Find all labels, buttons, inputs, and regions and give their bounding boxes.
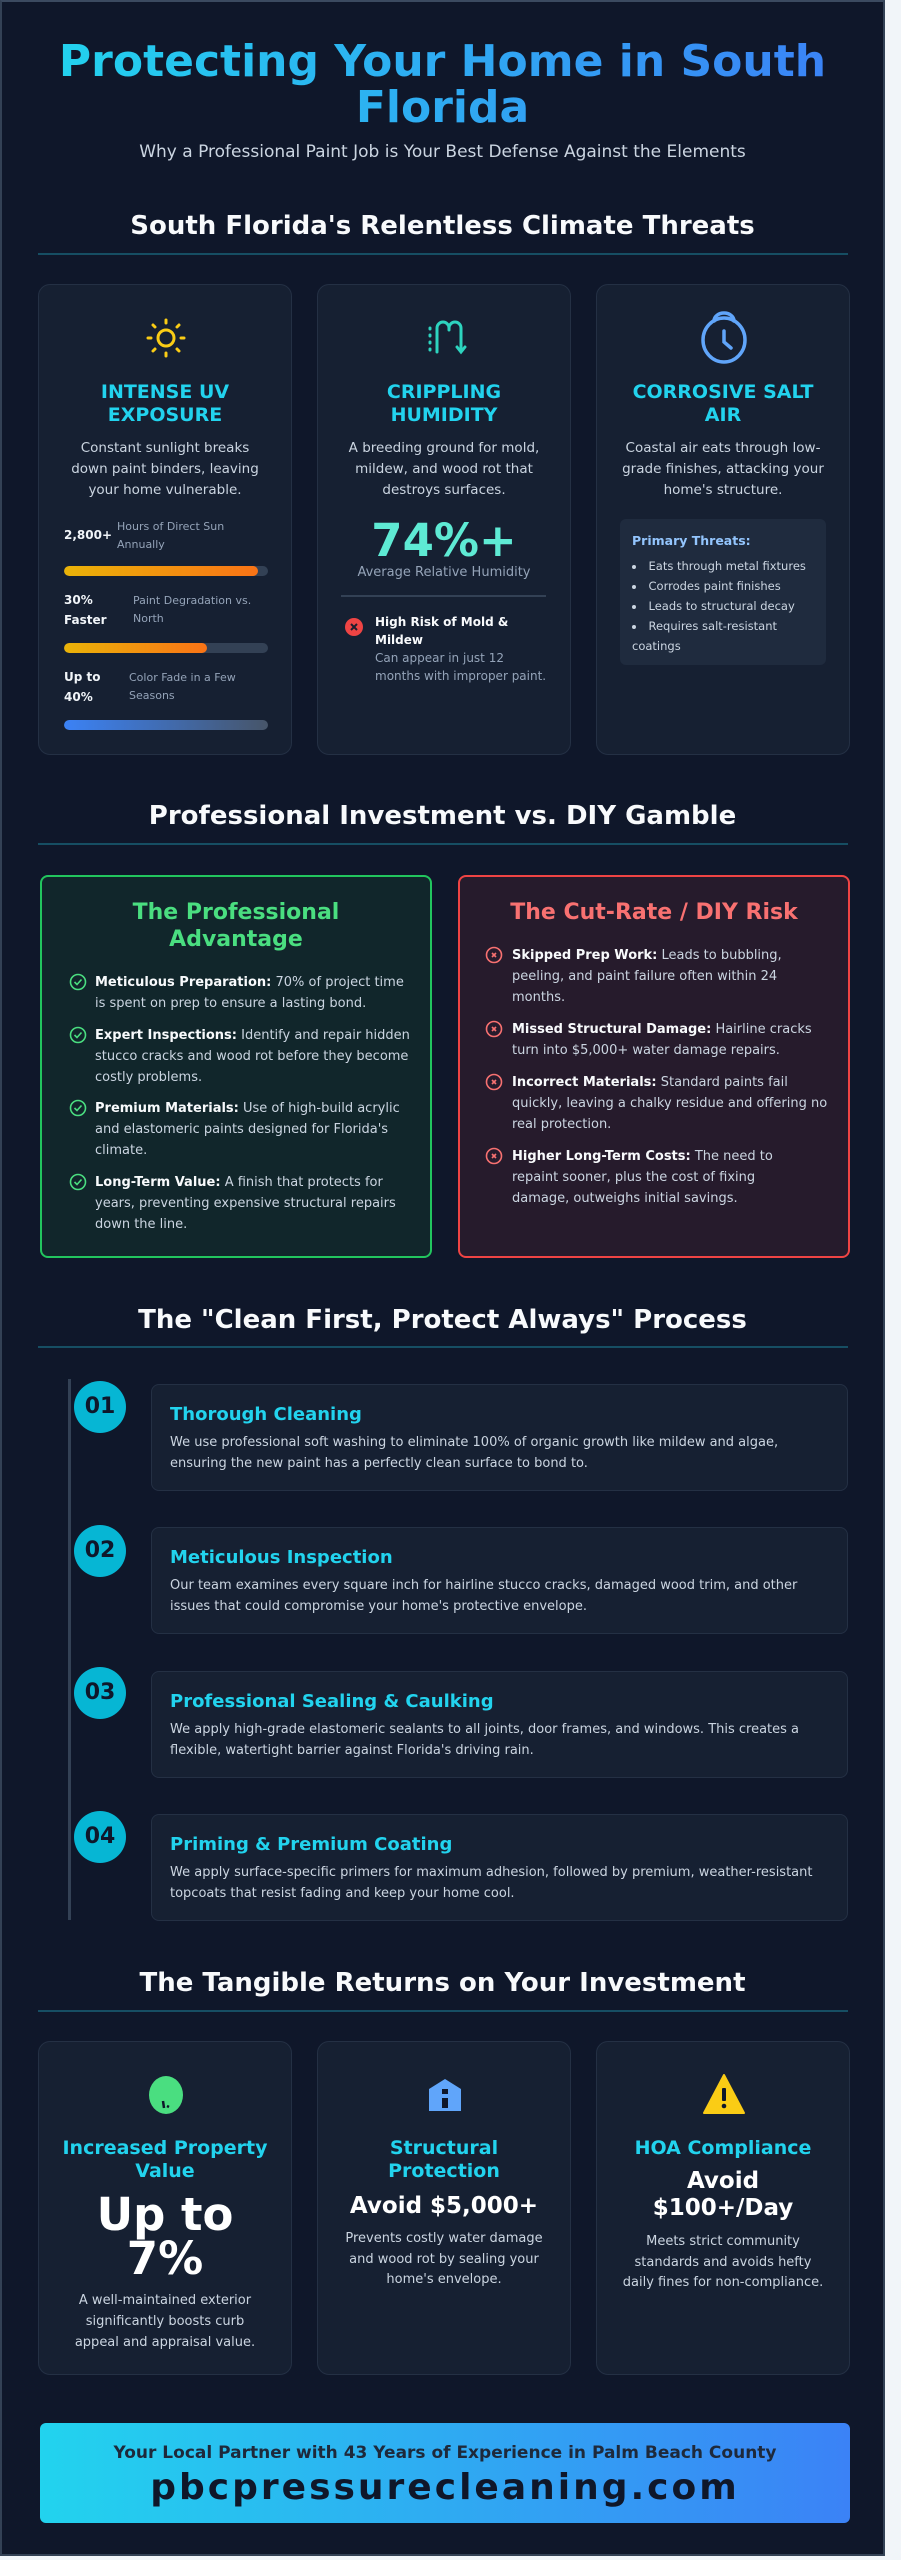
description: A well-maintained exterior xyxy=(79,2293,251,2308)
stat: 40% fade xyxy=(64,670,100,704)
step 4: We apply surface-specific primers for maximum adhesion, followed by premium, weather-resistant topcoats that resist fading and keep your home cool. xyxy=(170,1865,812,1901)
step 3: We apply high-grade elastomeric sealants to all joints, door frames, and windows. This creates a flexible, watertight barrier against Florida's driving rain. xyxy=(170,1722,799,1758)
title: EXPOSURE xyxy=(108,404,222,426)
title: Advantage xyxy=(169,927,303,952)
items: Skipped Prep Work: Leads to bubbling, peeling, and paint failure often within 24 months. xyxy=(512,948,782,1005)
panel: intense UV: Annually xyxy=(117,538,165,551)
title: Protection xyxy=(388,2160,500,2182)
heading: process: The "Clean First, Protect Always" Process xyxy=(138,1305,747,1335)
threats list xyxy=(620,519,826,665)
title: Increased Property xyxy=(62,2137,268,2159)
callout: mold risk xyxy=(345,615,546,683)
stat: 40% fade: Up to xyxy=(64,670,100,684)
description xyxy=(623,2234,823,2290)
panel: humidity xyxy=(317,284,571,755)
stat: 7% xyxy=(127,2232,203,2285)
panel: intense UV: North xyxy=(133,612,164,625)
description: destroys surfaces. xyxy=(382,482,506,498)
CTA banner: Your Local Partner with 43 Years of Experience in Palm Beach County xyxy=(113,2443,777,2463)
stat: 30% faster: 30% xyxy=(64,593,93,607)
step 1 xyxy=(74,1381,848,1491)
step 4: 04 xyxy=(85,1824,115,1849)
title: Protecting Your Home in South Florida xyxy=(59,36,826,133)
title: HUMIDITY xyxy=(391,404,497,426)
CTA banner xyxy=(40,2423,850,2523)
stat: 30% faster xyxy=(64,593,107,627)
items: Expert Inspections: Identify and repair hidden stucco cracks and wood rot before they become costly problems. xyxy=(95,1028,410,1085)
step 2: 02 xyxy=(85,1538,115,1563)
description: grade finishes, attacking your xyxy=(622,461,824,477)
callout: mold risk: High Risk of Mold & xyxy=(375,615,508,629)
items xyxy=(486,946,827,1206)
title xyxy=(62,2137,268,2182)
description: and wood rot by sealing your xyxy=(349,2252,539,2266)
panel: HOA compliance xyxy=(596,2041,850,2375)
step 1: We use professional soft washing to eliminate 100% of organic growth like mildew and algae, ensuring the new paint has a perfectly clean surface to bond to. xyxy=(170,1435,778,1471)
threats list: Primary Threats: xyxy=(632,533,751,548)
stat: Avoid xyxy=(687,2168,759,2194)
step 3 xyxy=(74,1667,848,1778)
description: A breeding ground for mold, xyxy=(349,440,539,456)
heading: professional vs DIY: Professional Investment vs. DIY Gamble xyxy=(149,801,736,831)
description: home's structure. xyxy=(664,482,782,498)
step 2: Our team examines every square inch for hairline stucco cracks, damaged wood trim, and other issues that could compromise your home's protective envelope. xyxy=(170,1578,797,1614)
stat: Up to xyxy=(97,2188,233,2241)
stat: $100+/Day xyxy=(653,2195,793,2221)
icon: warning xyxy=(703,2074,745,2114)
items: Premium Materials: Use of high-build acrylic and elastomeric paints designed for Florida's climate. xyxy=(95,1101,400,1158)
step 1: 01 xyxy=(85,1394,115,1419)
heading: climate threats: South Florida's Relentless Climate Threats xyxy=(130,211,755,241)
panel: intense UV xyxy=(38,284,292,755)
title xyxy=(101,381,229,426)
step 2: Meticulous Inspection xyxy=(170,1547,393,1568)
title xyxy=(388,2137,500,2182)
description xyxy=(348,440,539,498)
threats list: Corrodes paint finishes xyxy=(648,579,781,593)
panel: property value xyxy=(38,2041,292,2375)
title xyxy=(132,900,339,952)
step 4 xyxy=(74,1811,848,1921)
callout: mold risk: Mildew xyxy=(375,633,423,647)
title: INTENSE UV xyxy=(101,381,229,403)
description xyxy=(71,440,259,498)
panel: professional advantage xyxy=(40,875,432,1258)
items: Incorrect Materials: Standard paints fail quickly, leaving a chalky residue and offering no real protection. xyxy=(512,1075,827,1132)
timeline xyxy=(68,1379,848,1921)
icon: green coin xyxy=(149,2076,183,2114)
stat: Avoid $5,000+ xyxy=(350,2193,538,2219)
panel: DIY risk xyxy=(458,875,850,1258)
description: significantly boosts curb xyxy=(86,2314,244,2329)
step 4: Priming & Premium Coating xyxy=(170,1834,452,1855)
title: AIR xyxy=(705,404,741,426)
description: your home vulnerable. xyxy=(88,482,242,498)
icon: sun xyxy=(146,318,186,358)
title: Structural xyxy=(390,2137,498,2159)
stat: 40% fade: 40% xyxy=(64,690,93,704)
step 2 xyxy=(74,1525,848,1634)
description: daily fines for non-compliance. xyxy=(623,2275,823,2290)
description: standards and avoids hefty xyxy=(635,2254,811,2270)
heading: returns: The Tangible Returns on Your Investment xyxy=(140,1968,746,1998)
threats list: Requires salt-resistant coatings xyxy=(632,619,777,653)
description: Meets strict community xyxy=(646,2234,800,2249)
icon: humidity xyxy=(428,320,467,354)
title: HOA Compliance xyxy=(635,2137,811,2159)
threats list: Eats through metal fixtures xyxy=(648,559,806,573)
title xyxy=(633,381,814,426)
description xyxy=(75,2293,255,2350)
title: The Cut-Rate / DIY Risk xyxy=(510,900,798,925)
stat xyxy=(653,2168,793,2221)
CTA banner: pbcpressurecleaning.com xyxy=(150,2467,740,2508)
stat: 30% faster: Faster xyxy=(64,613,107,627)
icon: blue house xyxy=(429,2079,461,2111)
description: appeal and appraisal value. xyxy=(75,2335,255,2350)
threats list: Leads to structural decay xyxy=(648,599,795,613)
panel: intense UV: Seasons xyxy=(129,689,175,702)
title: CRIPPLING xyxy=(387,381,501,403)
description: home's envelope. xyxy=(386,2272,502,2287)
description xyxy=(345,2231,543,2287)
panel: salt air xyxy=(596,284,850,755)
title: CORROSIVE SALT xyxy=(633,381,813,403)
step 3: 03 xyxy=(85,1680,115,1705)
stat: 2800 hours: 2,800+ xyxy=(64,528,112,542)
items: Missed Structural Damage: Hairline cracks turn into $5,000+ water damage repairs. xyxy=(512,1022,812,1058)
description xyxy=(622,440,824,498)
panel: intense UV: Paint Degradation vs. xyxy=(133,594,251,607)
title xyxy=(387,381,501,426)
panel: intense UV: Hours of Direct Sun xyxy=(117,520,224,533)
callout: mold risk: Can appear in just 12 xyxy=(375,651,504,665)
panel: structural protection xyxy=(317,2041,571,2375)
description: Prevents costly water damage xyxy=(345,2231,543,2246)
items xyxy=(70,974,410,1232)
description: down paint binders, leaving xyxy=(71,461,259,477)
description: Coastal air eats through low- xyxy=(626,440,820,456)
description: Constant sunlight breaks xyxy=(81,440,249,456)
subtitle: Why a Professional Paint Job is Your Best Defense Against the Elements xyxy=(139,142,746,162)
stat: 74%: 74%+ xyxy=(371,514,517,567)
description: mildew, and wood rot that xyxy=(355,461,533,477)
items: Higher Long-Term Costs: The need to repaint sooner, plus the cost of fixing damage, outweighs initial savings. xyxy=(512,1149,773,1206)
panel: humidity: Average Relative Humidity xyxy=(357,565,531,580)
title: The Professional xyxy=(133,900,339,925)
step 1: Thorough Cleaning xyxy=(170,1404,362,1425)
items: Long-Term Value: A finish that protects for years, preventing expensive structural repairs down the line. xyxy=(95,1175,396,1232)
step 3: Professional Sealing & Caulking xyxy=(170,1691,494,1712)
items: Meticulous Preparation: 70% of project time is spent on prep to ensure a lasting bond. xyxy=(95,975,404,1011)
callout: mold risk: months with improper paint. xyxy=(375,669,546,683)
stat xyxy=(97,2188,233,2285)
icon: clock xyxy=(701,311,747,364)
title: Value xyxy=(135,2160,195,2182)
panel: intense UV: Color Fade in a Few xyxy=(129,671,236,684)
